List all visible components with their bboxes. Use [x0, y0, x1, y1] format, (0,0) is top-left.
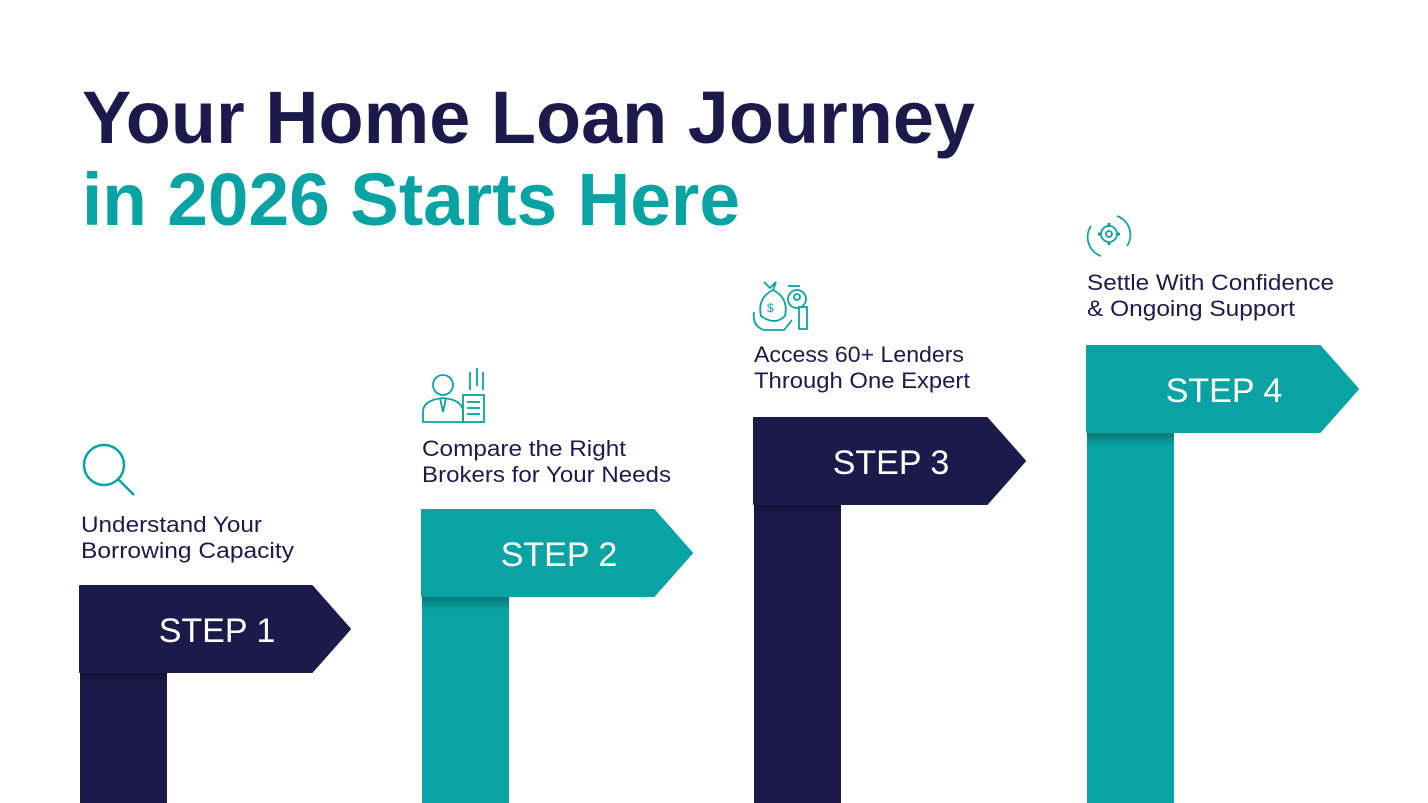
text: step 4: & Ongoing Support — [1087, 296, 1295, 321]
icon: money bag — [754, 282, 807, 330]
icon: magnifier — [84, 445, 134, 495]
text: step 2: Brokers for Your Needs — [422, 462, 671, 487]
banner: step 3 — [754, 418, 1025, 803]
title — [82, 76, 975, 241]
banner: step 1: STEP 1 — [159, 612, 275, 650]
text: step 2 — [422, 436, 671, 487]
banner: step 3: STEP 3 — [833, 444, 949, 482]
step 4 — [1087, 216, 1358, 803]
title: in 2026 Starts Here — [82, 158, 740, 241]
text: step 4 — [1087, 270, 1334, 321]
text: step 1: Borrowing Capacity — [81, 538, 294, 563]
text: step 2: Compare the Right — [422, 436, 626, 461]
icon: broker — [423, 368, 484, 422]
icon: money bag: $ — [767, 301, 774, 315]
text: step 3: Access 60+ Lenders — [754, 342, 964, 367]
step 3 — [754, 282, 1025, 803]
banner: step 1 — [80, 586, 350, 803]
text: step 3 — [754, 342, 970, 393]
text: step 1: Understand Your — [81, 512, 262, 537]
title: Your Home Loan Journey — [82, 76, 975, 159]
banner: step 4 — [1087, 346, 1358, 803]
icon: gear cycle — [1088, 216, 1130, 256]
text: step 3: Through One Expert — [754, 368, 970, 393]
text: step 1 — [81, 512, 294, 563]
banner: step 4: STEP 4 — [1166, 372, 1282, 410]
text: step 4: Settle With Confidence — [1087, 270, 1334, 295]
banner: step 2 — [422, 510, 692, 803]
banner: step 2: STEP 2 — [501, 536, 617, 574]
step 2 — [422, 368, 692, 803]
step 1 — [80, 445, 350, 803]
